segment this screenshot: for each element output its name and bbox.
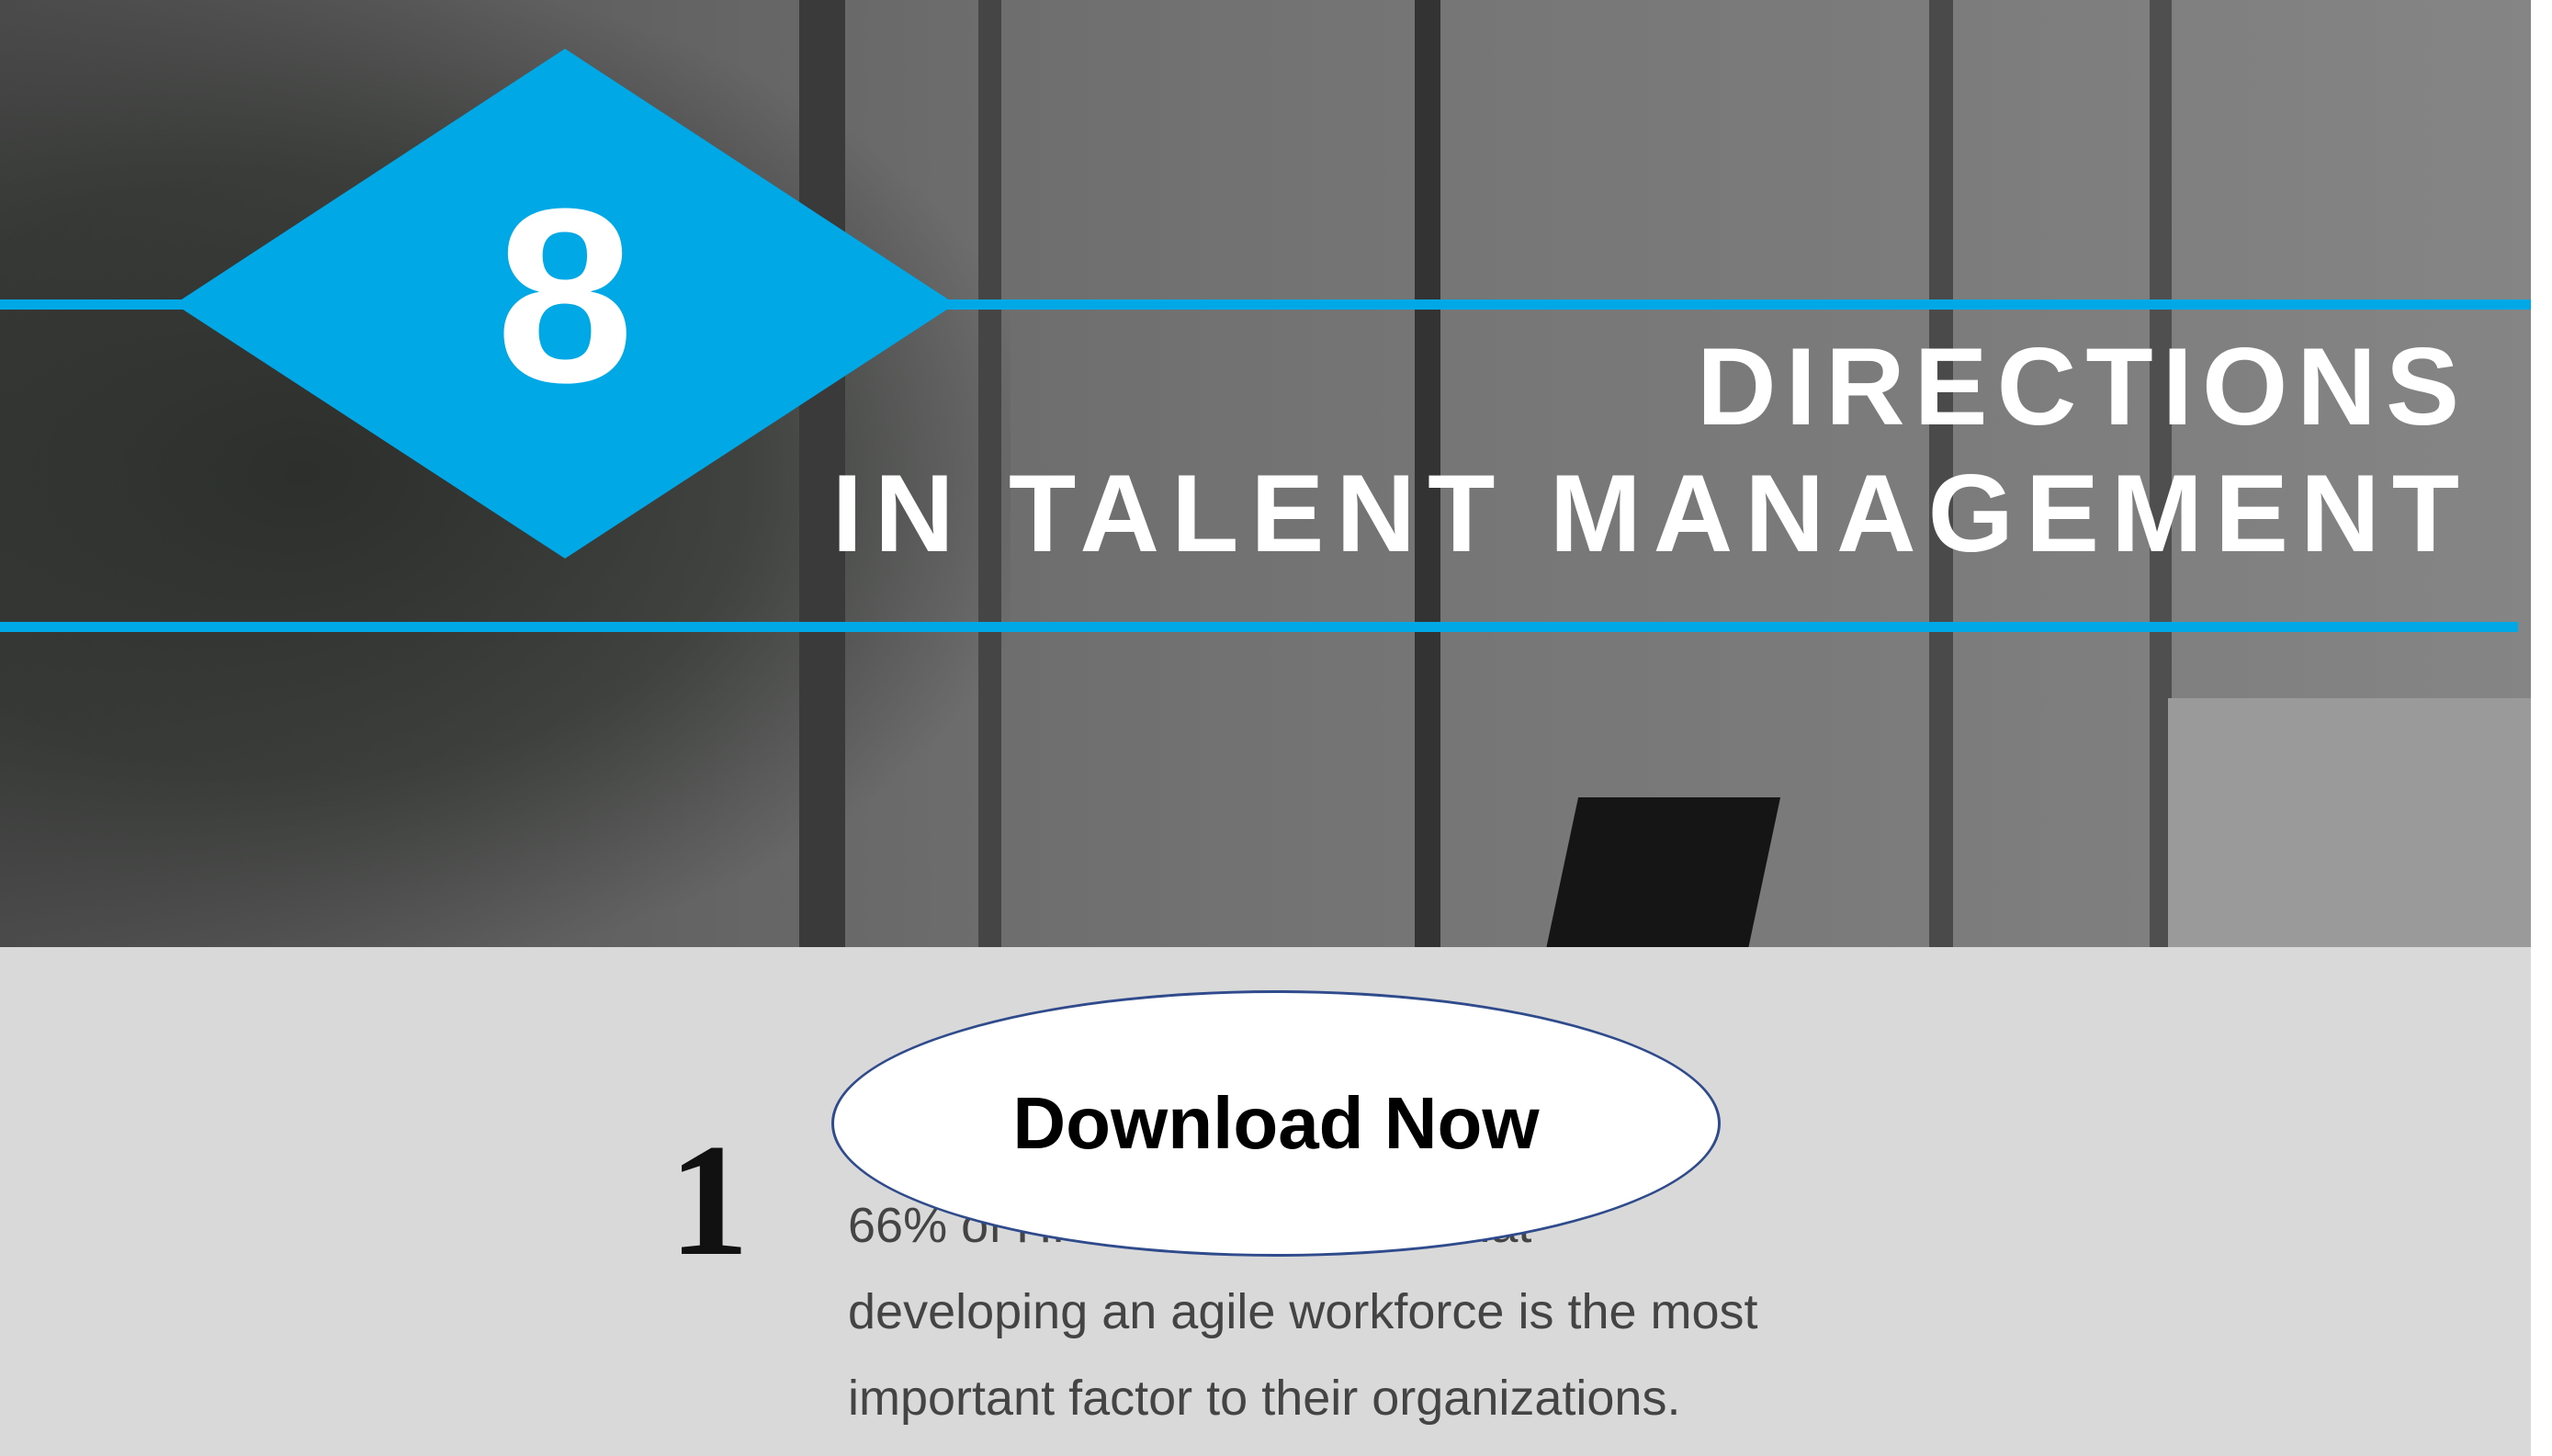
text block: statistic: 66% of HR leaders believe that — [848, 1198, 1531, 1253]
button: Download Now: Download Now — [1012, 1082, 1540, 1164]
badge: diamond with number 8 — [182, 49, 948, 559]
panel: hero photo background — [0, 0, 2531, 947]
text block: statistic — [848, 1198, 1758, 1426]
title — [832, 325, 2471, 575]
text block: statistic: developing an agile workforce is the most — [848, 1284, 1758, 1339]
title: DIRECTIONS — [1697, 325, 2468, 448]
panel: gray content area — [0, 947, 2531, 1456]
line: bottom blue rule — [0, 622, 2518, 632]
button: Download Now — [831, 990, 1721, 1257]
line: top blue rule — [0, 299, 2531, 310]
number 1: 1 — [669, 1111, 750, 1289]
badge: diamond with number 8: 8 — [496, 158, 634, 435]
text block: statistic: important factor to their organizations. — [848, 1371, 1680, 1426]
title: IN TALENT MANAGEMENT — [832, 452, 2471, 575]
